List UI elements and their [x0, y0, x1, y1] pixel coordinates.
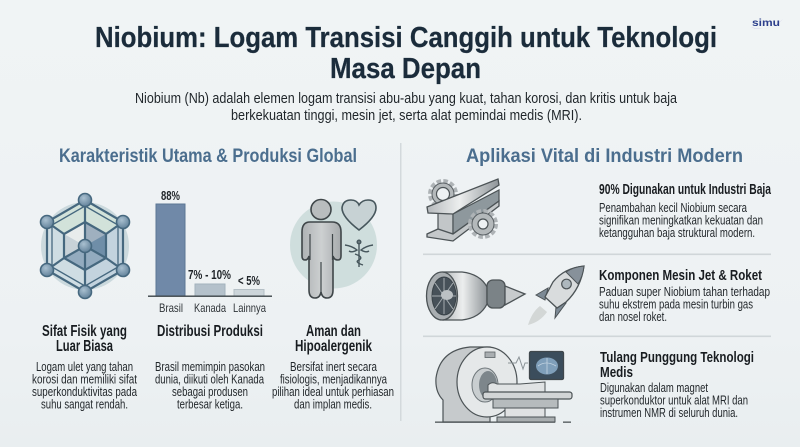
block: sifat fisik: Luar Biasa	[56, 338, 113, 355]
block: teknologi medis: Medis	[600, 364, 633, 381]
intro text	[135, 91, 678, 124]
icon: MRI scanner	[435, 347, 572, 423]
block: industri baja: Penambahan kecil Niobium secara	[599, 201, 747, 215]
bar: Lainnya under 5%: < 5%	[238, 274, 260, 288]
bar: Brasil 88%	[156, 189, 185, 315]
bar: Lainnya under 5%	[233, 274, 266, 315]
title: Niobium: Logam Transisi Canggih untuk Teknologi	[95, 22, 717, 54]
bar chart: distribusi produksi	[148, 189, 272, 315]
block: distribusi produksi: Distribusi Produksi	[157, 323, 263, 340]
panel: aplikasi vital	[423, 145, 771, 423]
block: sifat fisik: Sifat Fisik yang	[42, 323, 127, 340]
block: teknologi medis: Tulang Punggung Teknologi	[600, 349, 754, 366]
block: sifat fisik: suhu sangat rendah.	[41, 398, 128, 412]
block: distribusi produksi: sebagai produsen	[172, 385, 248, 399]
block: mesin jet dan roket	[599, 267, 770, 324]
block: distribusi produksi	[155, 323, 265, 412]
heading: karakteristik: Karakteristik Utama & Produksi Global	[59, 145, 357, 167]
icon: steel beam and gears	[427, 179, 499, 241]
block: aman dan hipoalergenik: dan implan medis.	[294, 398, 372, 412]
intro text: Niobium (Nb) adalah elemen logam transisi abu-abu yang kuat, tahan korosi, dan kritis untuk baja	[135, 91, 678, 107]
title: Masa Depan	[330, 53, 481, 85]
block: sifat fisik: Logam ulet yang tahan	[36, 360, 133, 374]
logo: simu: simu	[752, 17, 780, 29]
block: teknologi medis: instrumen NMR di seluruh dunia.	[600, 406, 738, 420]
intro text: berkekuatan tinggi, mesin jet, serta alat pemindai medis (MRI).	[231, 108, 582, 124]
icon: crystal lattice	[40, 194, 130, 298]
bar: Kanada 7-10%	[188, 268, 231, 315]
icon: rocket	[528, 266, 584, 325]
block: sifat fisik: superkonduktivitas pada	[32, 385, 137, 399]
block: aman dan hipoalergenik: pilihan ideal untuk perhiasan	[272, 385, 394, 399]
block: aman dan hipoalergenik: Aman dan	[306, 323, 361, 340]
title	[95, 22, 717, 85]
block: distribusi produksi: dunia, diikuti oleh Kanada	[155, 372, 264, 386]
block: distribusi produksi: Brasil memimpin pasokan	[155, 360, 265, 374]
panel: karakteristik dan produksi	[32, 145, 394, 412]
block: sifat fisik	[32, 323, 137, 412]
block: distribusi produksi: terbesar ketiga.	[177, 398, 243, 412]
block: mesin jet dan roket: dan nosel roket.	[599, 310, 667, 324]
bar: Brasil 88%: 88%	[161, 189, 180, 203]
block: aman dan hipoalergenik	[272, 323, 394, 412]
bar: Lainnya under 5%: Lainnya	[233, 301, 266, 315]
block: teknologi medis: Digunakan dalam magnet	[600, 381, 708, 395]
block: industri baja	[599, 181, 771, 240]
icon: person, heart and caduceus	[290, 200, 377, 298]
bar: Kanada 7-10%: 7% - 10%	[188, 268, 231, 282]
block: aman dan hipoalergenik: Hipoalergenik	[295, 338, 372, 355]
block: industri baja: ketangguhan baja struktural modern.	[599, 226, 755, 240]
block: aman dan hipoalergenik: Bersifat inert secara	[290, 360, 377, 374]
block: mesin jet dan roket: suhu ekstrem pada mesin turbin gas	[599, 298, 753, 312]
block: teknologi medis	[600, 349, 754, 420]
bar: Brasil 88%: Brasil	[159, 301, 183, 315]
bar: Kanada 7-10%: Kanada	[194, 301, 226, 315]
heading: aplikasi: Aplikasi Vital di Industri Modern	[466, 145, 743, 167]
icon: jet engine	[426, 272, 525, 320]
block: aman dan hipoalergenik: fisiologis, menjadikannya	[280, 372, 387, 386]
block: teknologi medis: superkonduktor untuk alat MRI dan	[600, 394, 748, 408]
block: sifat fisik: korosi dan memiliki sifat	[32, 372, 137, 386]
